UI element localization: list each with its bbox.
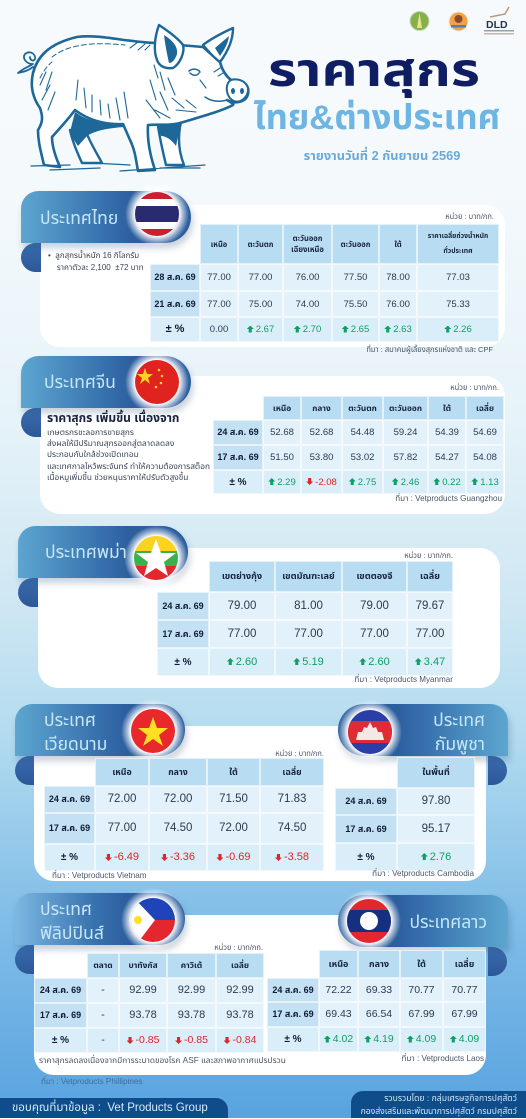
table: Thailand prices: ตะวันตก [248, 240, 273, 248]
heading: Thailand [21, 191, 191, 243]
unit label: หน่วย : บาท/กก. [445, 212, 494, 221]
table: Myanmar prices: 77.00 [294, 628, 323, 640]
table: Philippines prices: 92.99 [226, 984, 254, 996]
icon: Vietnam flag [122, 700, 184, 758]
heading: China [21, 356, 191, 408]
unit label: หน่วย : บาท/กก. [404, 551, 453, 560]
heading: Philippines [15, 893, 185, 945]
subtitle: ไทย&ต่างประเทศ [254, 99, 500, 137]
footer: compiled by: กองส่งเสริมและพัฒนาการปศุสัตว์ กรมปศุสัตว์ [361, 1106, 517, 1116]
footer: compiled by [351, 1091, 526, 1118]
icon: Philippines flag [121, 888, 185, 952]
heading: Vietnam [15, 704, 185, 756]
icon: China flag [126, 354, 188, 412]
table: Thailand prices: ตะวันออก [341, 240, 370, 248]
table: Vietnam prices: กลาง [168, 766, 188, 776]
table: Myanmar prices: 2.60 [236, 656, 257, 668]
table: Thailand prices: ตะวันออก [293, 234, 322, 243]
table: Vietnam prices: -6.49 [114, 851, 139, 863]
table: Cambodia prices: 97.80 [422, 795, 450, 807]
title: ราคาสุกร [268, 44, 480, 96]
table: Cambodia prices: 17 ส.ค. 69 [345, 824, 387, 834]
table: China prices: 54.48 [351, 427, 374, 438]
table: China prices: 1.13 [480, 476, 499, 488]
heading: Myanmar [18, 526, 188, 578]
source: Laos: ที่มา : Vetproducts Laos [402, 1054, 484, 1063]
table: Thailand prices: ราคาเฉลี่ยถ่วงน้ำหนัก [428, 233, 488, 240]
table: Myanmar prices: 77.00 [360, 628, 389, 640]
table: Vietnam prices: ± % [61, 852, 78, 863]
table: China prices: 57.82 [394, 452, 417, 463]
table: China prices: 54.08 [473, 452, 497, 463]
table: Myanmar prices: 79.67 [416, 600, 444, 612]
panel: Vietnam and Cambodia [14, 700, 513, 881]
text: China explanation: เนื้อหมูเพิ่มขึ้น ช่วยหนุนราคาให้ปรับตัวสูงขึ้น [47, 472, 188, 482]
table: Vietnam prices: ใต้ [229, 766, 238, 776]
source: Philippines: ที่มา : Vetproducts Phillipines [41, 1077, 142, 1086]
table: China prices: เหนือ [273, 402, 291, 412]
footer: thanks [0, 1098, 228, 1118]
table: Cambodia prices: ในพื้นที่ [422, 767, 450, 777]
text: China explanation: ประกอบกับใกล้ช่วงเปิดเทอม [47, 449, 139, 459]
heading: China: ประเทศจีน [44, 372, 116, 392]
report date: รายงานวันที่ 2 กันยายน 2569 [304, 148, 460, 163]
heading: Laos [338, 895, 508, 947]
table: China prices: 52.68 [310, 427, 333, 438]
table: Vietnam prices: -3.58 [284, 851, 309, 863]
table: Laos prices: 70.77 [451, 984, 478, 996]
panel: China [20, 354, 505, 514]
table: China prices: 52.68 [270, 427, 294, 438]
table: China prices [213, 396, 504, 494]
table: Laos prices: 69.43 [325, 1008, 352, 1020]
table: Vietnam prices [44, 758, 324, 871]
table: Thailand prices: 2.67 [256, 324, 274, 335]
heading: Cambodia: ประเทศ [433, 710, 485, 730]
note: piglet price: ราคาตัวละ 2,100 ±72 บาท [57, 262, 144, 272]
source: Cambodia: ที่มา : Vetproducts Cambodia [372, 869, 474, 878]
table: Laos prices: ใต้ [417, 958, 426, 968]
table: Laos prices: เหนือ [329, 958, 348, 968]
icon: Laos flag [337, 889, 401, 953]
table: China prices: 54.27 [435, 452, 459, 463]
table: Philippines prices: - [101, 1034, 105, 1046]
table: Thailand prices: 77.00 [207, 272, 231, 283]
table: Laos prices: 66.54 [366, 1008, 392, 1020]
table: Thailand prices: 28 ส.ค. 69 [154, 272, 196, 282]
table: Myanmar prices: เขตตองจี [356, 571, 393, 581]
table: Myanmar prices: ± % [174, 656, 192, 668]
panel: Thailand [20, 190, 505, 354]
table: Philippines prices: บาทังกัส [128, 960, 158, 970]
note: piglet price [48, 250, 144, 272]
table: China prices: 59.24 [394, 427, 417, 438]
table: Thailand prices: 76.00 [296, 272, 319, 283]
table: China prices: 51.50 [270, 452, 294, 463]
table: Thailand prices: 78.00 [386, 272, 410, 283]
table: Thailand prices: 75.00 [249, 298, 272, 310]
table: Thailand prices: 74.00 [296, 298, 319, 310]
note: Philippines: ราคาสุกรลดลงเนื่องจากมีการระบาดของโรค ASF และสภาพอากาศแปรปรวน [39, 1055, 286, 1065]
icon: Thai flag [126, 190, 188, 244]
table: Thailand prices: 77.03 [446, 272, 470, 283]
table: Laos prices: 24 ส.ค. 69 [272, 984, 314, 994]
logo: department seal [449, 12, 468, 31]
table: Philippines prices: 92.99 [129, 984, 157, 996]
table: Philippines prices: -0.85 [136, 1034, 159, 1046]
table: China prices: ± % [229, 476, 247, 488]
table: Cambodia prices: 95.17 [422, 822, 450, 834]
pig illustration [17, 24, 250, 172]
table: Myanmar prices: 79.00 [228, 600, 256, 612]
table: Laos prices: ± % [284, 1034, 302, 1045]
table: Thailand prices: 2.63 [393, 324, 412, 335]
heading: Philippines: ประเทศ [40, 899, 92, 919]
heading: Cambodia [338, 704, 508, 756]
table: Vietnam prices: 24 ส.ค. 69 [49, 794, 90, 804]
table: China prices: 53.02 [351, 452, 374, 463]
table: China prices: 2.46 [401, 476, 419, 488]
table: Thailand prices: 2.65 [351, 324, 369, 335]
heading: Vietnam: ประเทศ [44, 710, 96, 730]
table: Thailand prices: ± % [166, 323, 184, 335]
logos [410, 6, 514, 34]
table: Vietnam prices: 72.00 [164, 793, 192, 805]
table: Philippines prices: -0.85 [184, 1034, 208, 1046]
table: Thailand prices: ใต้ [394, 240, 402, 248]
table: Vietnam prices: เหนือ [112, 766, 132, 776]
table: China prices: 54.39 [435, 427, 459, 438]
table: Myanmar prices: 77.00 [416, 628, 444, 640]
table: China prices: ใต้ [443, 402, 451, 412]
text: China explanation: ส่งผลให้มีปริมาณสุกรออกสู่ตลาดลดลง [47, 438, 174, 448]
table: Philippines prices: 92.99 [178, 984, 205, 996]
table: Laos prices: 70.77 [408, 984, 435, 996]
table: Thailand prices: 77.00 [207, 298, 231, 310]
text: China explanation: ราคาสุกร เพิ่มขึ้น เนื่องจาก [47, 411, 179, 425]
table: Myanmar prices: เขตมัณฑะเลย์ [282, 571, 335, 581]
table: Laos prices: 17 ส.ค. 69 [272, 1009, 314, 1019]
heading: Vietnam: เวียดนาม [44, 734, 107, 754]
table: Philippines prices: - [101, 984, 105, 996]
table: China prices: เฉลี่ย [476, 402, 494, 412]
table: Myanmar prices: 5.19 [302, 656, 324, 668]
table: Laos prices: 4.19 [373, 1033, 394, 1045]
table: Myanmar prices: 77.00 [228, 628, 256, 640]
table: Laos prices: 67.99 [408, 1008, 435, 1020]
heading: Thailand: ประเทศไทย [40, 208, 118, 228]
heading: Myanmar: ประเทศพม่า [45, 542, 127, 562]
table: Myanmar prices: 81.00 [294, 600, 323, 612]
table: Philippines prices [34, 953, 264, 1053]
table: Myanmar prices: เขตย่างกุ้ง [222, 571, 262, 581]
table: Laos prices: 67.99 [451, 1008, 478, 1020]
table: China prices: -2.08 [315, 476, 337, 488]
table: Thailand prices: ทั่วประเทศ [443, 248, 473, 255]
table: Thailand prices: 76.00 [386, 298, 410, 310]
table: Myanmar prices: 24 ส.ค. 69 [162, 600, 204, 610]
table: Laos prices: 69.33 [366, 984, 392, 996]
table: Thailand prices: 75.50 [344, 298, 367, 310]
table: Cambodia prices: 2.76 [430, 850, 451, 862]
source: ที่มา : สมาคมผู้เลี้ยงสุกรแห่งชาติ และ CPF [366, 345, 493, 354]
table: Philippines prices: ตลาด [93, 960, 113, 970]
table: China prices: 53.80 [310, 452, 333, 463]
table: China prices: 24 ส.ค. 69 [217, 427, 259, 437]
table: Philippines prices: เฉลี่ย [231, 960, 249, 970]
table: Vietnam prices: 77.00 [108, 822, 136, 834]
table: Vietnam prices: 71.50 [219, 793, 248, 805]
table: China prices: 54.69 [473, 427, 497, 438]
table: Myanmar prices: 79.00 [360, 600, 389, 612]
note: piglet price: • ลูกสุกรน้ำหนัก 16 กิโลกรัม [48, 251, 139, 260]
table: Vietnam prices: 74.50 [278, 822, 306, 834]
table: Philippines prices: 93.78 [129, 1009, 157, 1021]
table: Thailand prices: 2.70 [303, 324, 321, 335]
heading: Cambodia: กัมพูชา [435, 734, 485, 754]
text: China explanation: เกษตรกรชะลอการขายสุกร [47, 427, 134, 437]
panel: Myanmar [17, 526, 500, 688]
table: Cambodia prices: 24 ส.ค. 69 [345, 796, 387, 806]
table: Philippines prices: -0.84 [233, 1034, 256, 1046]
table: Thailand prices: 77.00 [249, 272, 272, 283]
table: Vietnam prices: -0.69 [225, 851, 251, 863]
table: Laos prices: 4.09 [416, 1033, 436, 1045]
footer: compiled by: รวบรวมโดย : กลุ่มเศรษฐกิจการปศุสัตว์ [384, 1093, 517, 1103]
table: China prices: 17 ส.ค. 69 [217, 452, 259, 462]
table: Myanmar prices: 2.60 [368, 656, 390, 668]
table: Myanmar prices: 17 ส.ค. 69 [162, 628, 204, 638]
panel: Philippines and Laos [0, 889, 526, 1118]
heading: Philippines: ฟิลิปปินส์ [40, 923, 104, 943]
table: Vietnam prices: 72.00 [219, 822, 248, 834]
table: Laos prices: เฉลี่ย [455, 958, 474, 968]
table: Laos prices: 4.02 [333, 1033, 353, 1045]
source: ที่มา : Vetproducts Myanmar [354, 675, 453, 684]
table: Laos prices [267, 950, 486, 1052]
table: Thailand prices: 21 ส.ค. 69 [154, 298, 196, 308]
table: China prices: 2.75 [358, 476, 376, 488]
footer: thanks: ขอบคุณที่มาข้อมูล : Vet Products Group [12, 1102, 208, 1114]
table: Philippines prices: - [101, 1009, 105, 1021]
unit label: หน่วย : บาท/กก. [450, 383, 499, 392]
table: Thailand prices: 0.00 [210, 324, 228, 335]
table: China prices: 0.22 [442, 476, 461, 488]
text: China explanation: และเทศกาลไหว้พระจันทร์ ทำให้ความต้องการสต็อก [47, 461, 210, 471]
table: Thailand prices [150, 224, 499, 342]
table: Thailand prices: 2.26 [453, 324, 472, 335]
table: China prices: 2.29 [277, 476, 296, 488]
table: Philippines prices: 24 ส.ค. 69 [40, 985, 81, 995]
unit label: หน่วย : บาท/กก. [214, 943, 263, 952]
table: Vietnam prices: 71.83 [278, 793, 306, 805]
table: Laos prices: 72.22 [325, 984, 352, 996]
table: Philippines prices: 93.78 [178, 1009, 205, 1021]
table: Vietnam prices: 72.00 [108, 793, 136, 805]
logo: ministry seal [410, 12, 429, 30]
table: Philippines prices: คาวิเต้ [181, 960, 202, 970]
icon: Myanmar flag [124, 526, 188, 584]
text: China explanation [47, 410, 210, 482]
source: Vietnam: ที่มา : Vetproducts Vietnam [52, 871, 146, 880]
table: Philippines prices: 93.78 [226, 1009, 254, 1021]
table: Philippines prices: ± % [52, 1035, 69, 1046]
unit label: หน่วย : บาท/กก. [275, 749, 324, 758]
table: Vietnam prices: 74.50 [164, 822, 192, 834]
table: Vietnam prices: -3.36 [170, 851, 195, 863]
table: China prices: ตะวันตก [348, 402, 377, 412]
table: Vietnam prices: 17 ส.ค. 69 [49, 823, 90, 833]
table: China prices: ตะวันออก [389, 402, 422, 412]
table: Myanmar prices: เฉลี่ย [420, 571, 440, 581]
table: Vietnam prices: เฉลี่ย [282, 766, 302, 776]
table: Myanmar prices: 3.47 [424, 656, 445, 668]
source: ที่มา : Vetproducts Guangzhou [395, 494, 502, 503]
table: Thailand prices: 75.33 [446, 298, 470, 310]
table: Laos prices: กลาง [369, 958, 389, 968]
table: Thailand prices: 77.50 [344, 272, 367, 283]
table: Philippines prices: 17 ส.ค. 69 [40, 1010, 81, 1020]
heading: Laos: ประเทศลาว [409, 912, 487, 932]
logo: DLD: DLD [486, 19, 508, 31]
table: Cambodia prices [335, 757, 475, 871]
table: China prices: กลาง [312, 402, 331, 412]
table: Thailand prices: เหนือ [211, 240, 227, 248]
table: Cambodia prices: ± % [357, 852, 375, 862]
table: Myanmar prices [157, 561, 453, 676]
icon: Cambodia flag [338, 700, 402, 764]
table: Thailand prices: เฉียงเหนือ [291, 245, 324, 254]
table: Laos prices: 4.09 [459, 1033, 479, 1045]
